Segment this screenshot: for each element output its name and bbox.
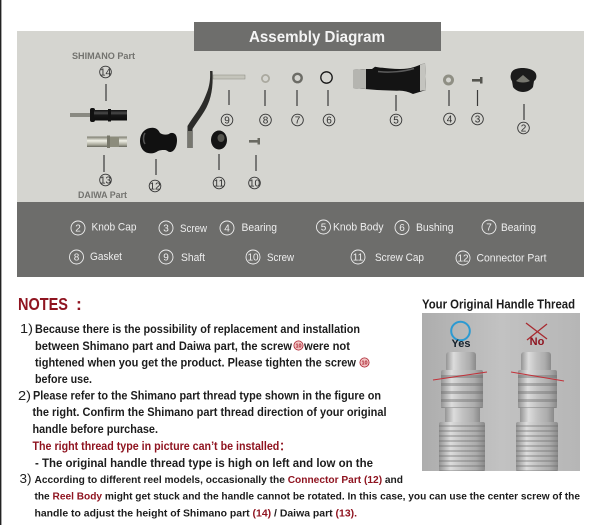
part 6: bushing [321, 72, 335, 126]
legend: knob cap: 2 [75, 224, 81, 234]
panel: assembly diagram [17, 22, 584, 203]
legend: gasket [70, 250, 122, 264]
slant line: left bolt [433, 372, 487, 380]
legend: knob cap: Knob Cap [92, 222, 136, 234]
part 3: screw [472, 77, 483, 126]
icon: red circled 10: 10 [361, 361, 368, 367]
part 10: screw: 10 [249, 178, 260, 190]
part 5: knob body: 5 [393, 116, 399, 126]
part 7: bearing [292, 74, 303, 126]
label: yes: Yes [452, 338, 470, 350]
bolt: correct thread [439, 352, 485, 471]
icon: red circled 10 [360, 358, 369, 367]
panel: parts legend [17, 202, 584, 277]
legend: knob body: 5 [321, 222, 327, 234]
legend: screw 3: 3 [163, 224, 169, 234]
part 6: bushing: 6 [326, 116, 332, 126]
legend: screw 10 [246, 250, 294, 264]
note 3: According to different reel models, occasionally the Connector Part (12) and [34, 474, 403, 486]
note 1: tightened when you get the product. Please tighten the screw [35, 358, 356, 370]
title: Assembly Diagram [249, 29, 385, 46]
legend: connector part: Connector Part [476, 252, 546, 264]
part 8: gasket [260, 75, 271, 126]
note 2: Please refer to the Shimano part thread type shown in the figure on [33, 390, 381, 402]
part 11: screw cap [211, 130, 227, 190]
panel: thread photo [422, 313, 580, 471]
icon: red cross [526, 323, 547, 340]
legend: shaft [159, 250, 205, 264]
note 2: the right. Confirm the Shimano part thread direction of your original [32, 407, 386, 419]
legend: screw cap: Screw Cap [375, 252, 424, 264]
legend: bushing: Bushing [416, 222, 454, 234]
legend: bushing: 6 [399, 223, 405, 234]
part 2: knob cap: 2 [521, 124, 527, 134]
part 12: connector part: 12 [149, 182, 161, 192]
legend: gasket: 8 [74, 252, 80, 264]
note 2: 2) [18, 389, 31, 403]
note 1: Because there is the possibility of replacement and installation [35, 324, 360, 336]
legend: bearing 7: Bearing [501, 222, 536, 234]
legend: shaft: Shaft [181, 252, 205, 264]
note 2: handle before purchase. [32, 424, 158, 436]
legend: screw 10: Screw [267, 252, 294, 264]
part 13: Daiwa part [87, 136, 127, 186]
legend: bearing 4 [220, 221, 277, 235]
slant line: right bolt [511, 372, 564, 381]
part 14: Shimano part: 14 [100, 68, 111, 78]
legend: screw 3 [159, 221, 207, 235]
legend: connector part: 12 [457, 254, 469, 264]
part 9: shaft and crank arm [188, 71, 245, 148]
note 2: The right thread type in picture can’t be installed： [32, 441, 290, 453]
legend: screw 10: 10 [247, 252, 259, 264]
legend: bearing 4: 4 [224, 224, 230, 234]
part 13: Daiwa part: 13 [100, 176, 111, 186]
legend: bushing [395, 220, 454, 234]
label: Shimano part: SHIMANO Part [72, 51, 136, 62]
legend: bearing 7: 7 [486, 222, 492, 234]
heading: notes: NOTES [18, 294, 68, 314]
note 1: 1) [20, 322, 33, 336]
legend: screw cap [351, 250, 424, 264]
part 9: shaft and crank arm: 9 [224, 116, 230, 126]
legend: knob body [316, 220, 384, 234]
part 10: screw [249, 138, 260, 190]
icon: red circled 10 [294, 341, 303, 350]
legend: bearing 4: Bearing [242, 222, 277, 234]
legend: knob cap [71, 221, 136, 235]
note 1 [20, 322, 369, 386]
note 3: the Reel Body might get stuck and the handle cannot be rotated. In this case, you can use the center screw of the [34, 490, 580, 502]
icon: blue circle [451, 322, 470, 340]
title [194, 22, 441, 51]
legend: screw 3: Screw [180, 223, 207, 235]
part 5: knob body [353, 63, 426, 126]
legend: screw cap: 11 [353, 252, 364, 264]
legend: knob body: Knob Body [333, 222, 384, 234]
bolt: wrong thread [516, 352, 558, 471]
part 4: bearing: 4 [447, 114, 453, 126]
heading: your original handle thread: Your Original Handle Thread [422, 298, 575, 312]
note 1: between Shimano part and Daiwa part, the screw [35, 341, 292, 353]
note 3: handle to adjust the height of Shimano part (14) / Daiwa part (13). [34, 508, 357, 520]
part 4: bearing [444, 76, 455, 126]
label: no: No [530, 336, 545, 348]
label: Daiwa part: DAIWA Part [78, 190, 128, 201]
part 8: gasket: 8 [263, 116, 269, 126]
legend: connector part [456, 251, 546, 265]
icon: red circled 10: 10 [295, 344, 302, 350]
part 14: Shimano part [70, 66, 127, 122]
note 2 [18, 389, 386, 470]
note 3 [20, 472, 580, 520]
part 2: knob cap [511, 68, 536, 134]
note 2: - The original handle thread type is high on left and low on the [35, 458, 373, 470]
left border line [0, 0, 1, 525]
part 11: screw cap: 11 [214, 178, 225, 190]
part 12: connector part [140, 128, 177, 192]
note 1: before use. [35, 374, 92, 386]
legend: bearing 7 [482, 220, 536, 234]
heading: notes: : [76, 294, 82, 314]
legend: gasket: Gasket [90, 251, 122, 263]
part 7: bearing: 7 [295, 116, 301, 126]
note 3: 3) [20, 472, 32, 486]
legend: shaft: 9 [163, 252, 169, 264]
part 3: screw: 3 [475, 114, 481, 126]
note 1: were not [303, 341, 350, 353]
